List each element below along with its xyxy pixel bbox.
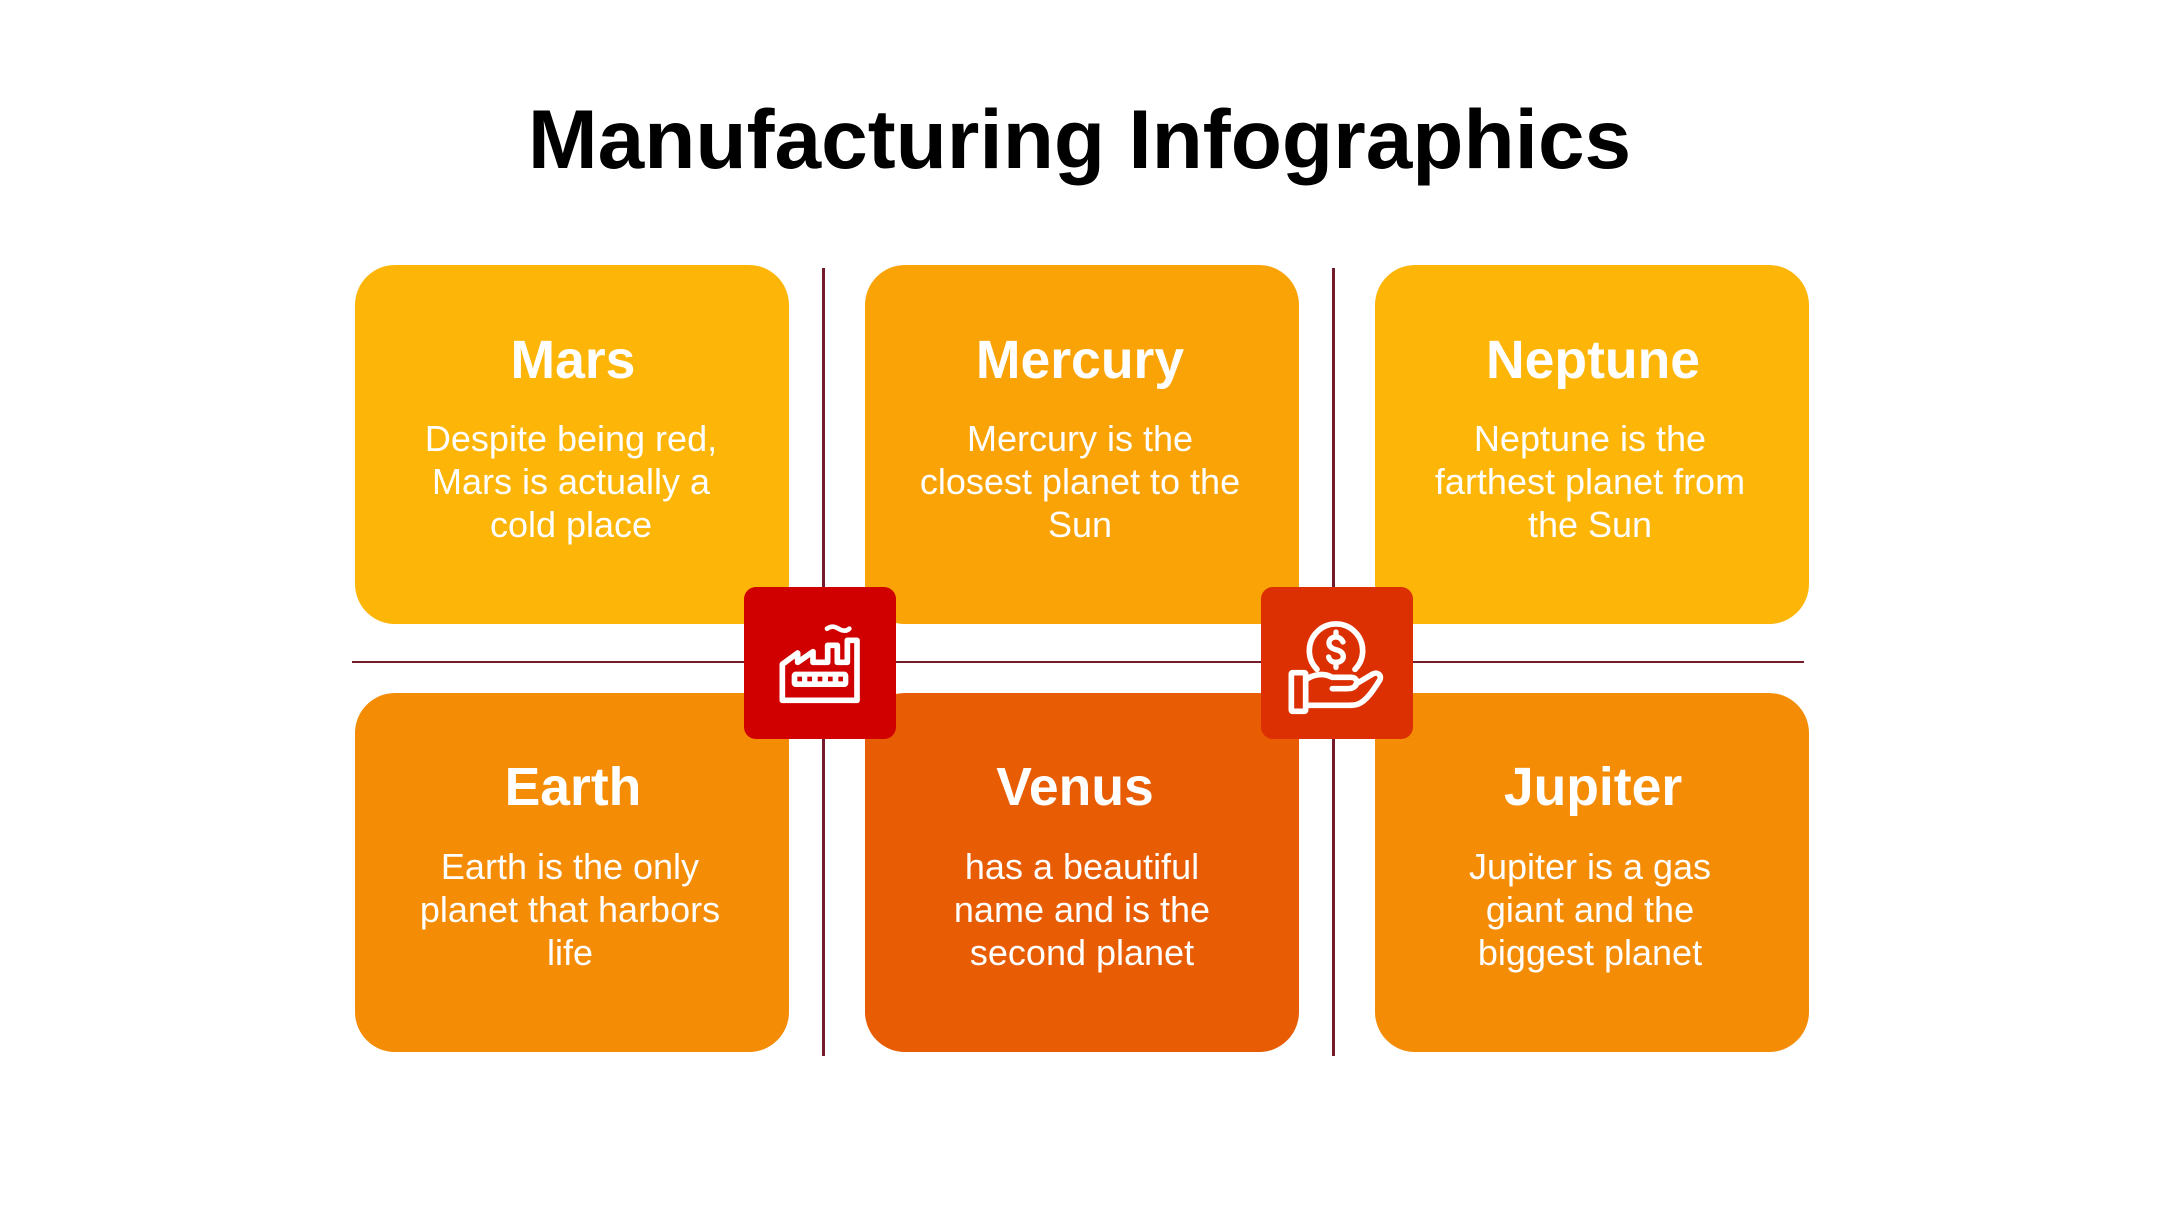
text: Jupiter description: biggest planet xyxy=(1478,932,1702,973)
text: Neptune description: the Sun xyxy=(1528,504,1652,545)
text: Mercury description: Mercury is the xyxy=(967,418,1193,459)
text: Earth description: life xyxy=(547,932,593,973)
heading: Earth: Earth xyxy=(505,758,641,817)
text: Neptune description: farthest planet from xyxy=(1435,461,1745,502)
text: Venus description xyxy=(954,846,1210,973)
text: Earth description: Earth is the only xyxy=(441,846,699,887)
panel: Venus xyxy=(865,693,1299,1052)
icon: hand holding coin xyxy=(1261,587,1413,739)
heading: Mars: Mars xyxy=(511,330,635,390)
panel: Jupiter xyxy=(1375,693,1809,1052)
text: Neptune description: Neptune is the xyxy=(1474,418,1706,459)
text: Earth description: planet that harbors xyxy=(420,889,720,930)
text: Mars description: Despite being red, xyxy=(425,418,717,459)
text: Jupiter description: Jupiter is a gas xyxy=(1469,846,1711,887)
panel: Neptune xyxy=(1375,265,1809,624)
text: Jupiter description xyxy=(1469,846,1711,973)
text: Venus description: name and is the xyxy=(954,889,1210,930)
text: Jupiter description: giant and the xyxy=(1486,889,1694,930)
text: Mars description: cold place xyxy=(490,504,652,545)
text: Mercury description xyxy=(920,418,1240,545)
text: Mercury description: Sun xyxy=(1048,504,1112,545)
text: Venus description: second planet xyxy=(970,932,1194,973)
text: Mars description xyxy=(425,418,717,545)
heading: Jupiter: Jupiter xyxy=(1504,758,1682,817)
heading: Venus: Venus xyxy=(996,758,1154,817)
title: Manufacturing Infographics xyxy=(528,92,1631,186)
text: Neptune description xyxy=(1435,418,1745,545)
heading: Neptune: Neptune xyxy=(1486,330,1700,390)
text: Mercury description: closest planet to the xyxy=(920,461,1240,502)
heading: Mercury: Mercury xyxy=(976,330,1184,390)
text: Venus description: has a beautiful xyxy=(965,846,1199,887)
icon: factory xyxy=(744,587,896,739)
panel: Mars xyxy=(355,265,789,624)
text: Earth description xyxy=(420,846,720,973)
panel: Mercury xyxy=(865,265,1299,624)
panel: Earth xyxy=(355,693,789,1052)
text: Mars description: Mars is actually a xyxy=(432,461,710,502)
